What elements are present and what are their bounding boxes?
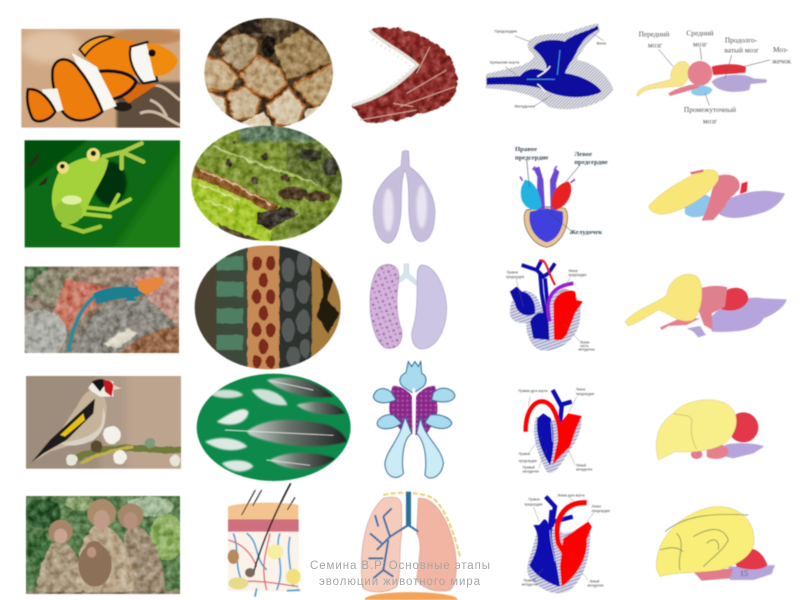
mammal heart labels <box>522 494 610 587</box>
heart: mammal <box>522 494 610 593</box>
fish brain labels: Средний <box>686 29 714 38</box>
amphibian heart labels: Левое <box>574 151 592 158</box>
fish brain labels <box>639 29 792 125</box>
bird heart labels: Правый <box>523 466 535 470</box>
lungs: mammal <box>361 492 460 600</box>
skin: fish scales <box>204 17 334 128</box>
brain: reptile <box>625 274 787 337</box>
reptile heart labels: предсердие <box>568 273 587 277</box>
fish brain labels: Продолго- <box>725 36 758 45</box>
amphibian heart labels: предсердие <box>515 155 549 162</box>
bird heart labels: предсердие <box>519 459 537 463</box>
fish heart labels: Вена <box>597 41 607 46</box>
footer caption: эволюции животного мира <box>319 576 481 588</box>
gills <box>352 27 457 123</box>
bird heart labels: желудочек <box>523 470 539 474</box>
photo: clownfish <box>20 28 181 128</box>
lungs: amphibian <box>373 150 435 243</box>
fish brain labels: мозг <box>648 40 662 49</box>
brain: amphibian <box>648 170 785 221</box>
reptile heart labels: желудочка <box>578 347 595 351</box>
amphibian heart labels: Правое <box>515 146 537 153</box>
bird heart labels: желудочек <box>576 468 593 472</box>
mammal heart labels: желудочек <box>522 582 538 586</box>
photo: glass frog on leaf <box>24 139 181 248</box>
mammal heart labels: Левый <box>589 579 600 583</box>
fish brain labels: мозг <box>693 40 707 49</box>
bird heart labels <box>518 388 594 474</box>
amphibian heart labels <box>515 146 608 236</box>
mammal heart labels: Правый <box>523 578 536 582</box>
bird heart labels: Правое <box>519 452 530 456</box>
fish brain labels: Моз- <box>773 45 789 54</box>
photo: goldfinch on branch <box>25 375 182 470</box>
amphibian heart labels: предсердие <box>574 159 608 166</box>
photo: monkeys <box>25 495 181 595</box>
mammal heart labels: Левая дуга аорты <box>557 494 585 498</box>
reptile heart labels: Правое <box>507 270 518 274</box>
mammal heart labels: Левое <box>592 504 601 508</box>
fish brain labels: жечок <box>771 57 792 66</box>
bird heart labels: Левое <box>576 388 586 392</box>
reptile heart labels: Левое <box>568 269 578 273</box>
fish heart labels: Предсердие <box>494 29 518 34</box>
mammal heart labels: желудочек <box>587 583 604 587</box>
mammal heart labels: предсердие <box>592 509 610 513</box>
brain: fish with labels <box>637 29 792 125</box>
bird heart labels: предсердие <box>576 392 594 396</box>
skin: feathers <box>195 373 353 483</box>
brain: mammal <box>656 507 775 581</box>
fish heart labels <box>490 29 607 108</box>
bird heart labels: Правая дуга аорты <box>518 389 548 393</box>
reptile heart labels: предсердие <box>506 275 524 279</box>
fish brain labels: мозг <box>703 116 717 125</box>
brain: bird <box>656 400 764 460</box>
photo: lizard on rocks <box>24 266 180 354</box>
skin: mammal cross-section with hair <box>228 483 301 597</box>
reptile heart labels <box>506 269 595 351</box>
reptile heart labels: часть <box>580 344 589 348</box>
footer caption <box>310 560 490 588</box>
fish heart labels: Брюшная аорта <box>490 60 520 65</box>
mammal heart labels: предсердие <box>524 502 543 506</box>
fish heart chambers <box>487 26 602 97</box>
fish brain labels: Передний <box>639 30 670 39</box>
footer caption: Семина В.Р. Основные этапы <box>310 560 490 572</box>
fish heart labels: Желудочек <box>514 103 535 108</box>
heart: bird <box>518 388 594 474</box>
skin: frog skin <box>190 125 343 242</box>
lungs: bird with air sacs <box>373 362 455 478</box>
skin: reptile scales <box>194 244 342 370</box>
lungs: reptile <box>370 264 447 349</box>
amphibian heart labels: Желудочек <box>569 229 602 236</box>
heart: reptile <box>506 260 595 351</box>
bird heart labels: Левый <box>576 464 586 468</box>
fish brain labels: ватый мозг <box>724 46 759 55</box>
brain: mammal: 15 <box>740 569 748 578</box>
fish brain labels: Промежуточный <box>684 105 736 114</box>
mammal heart labels: Правое <box>528 498 540 502</box>
heart: amphibian <box>515 146 608 247</box>
reptile heart labels: Левая <box>580 340 590 344</box>
heart: fish <box>486 23 613 109</box>
